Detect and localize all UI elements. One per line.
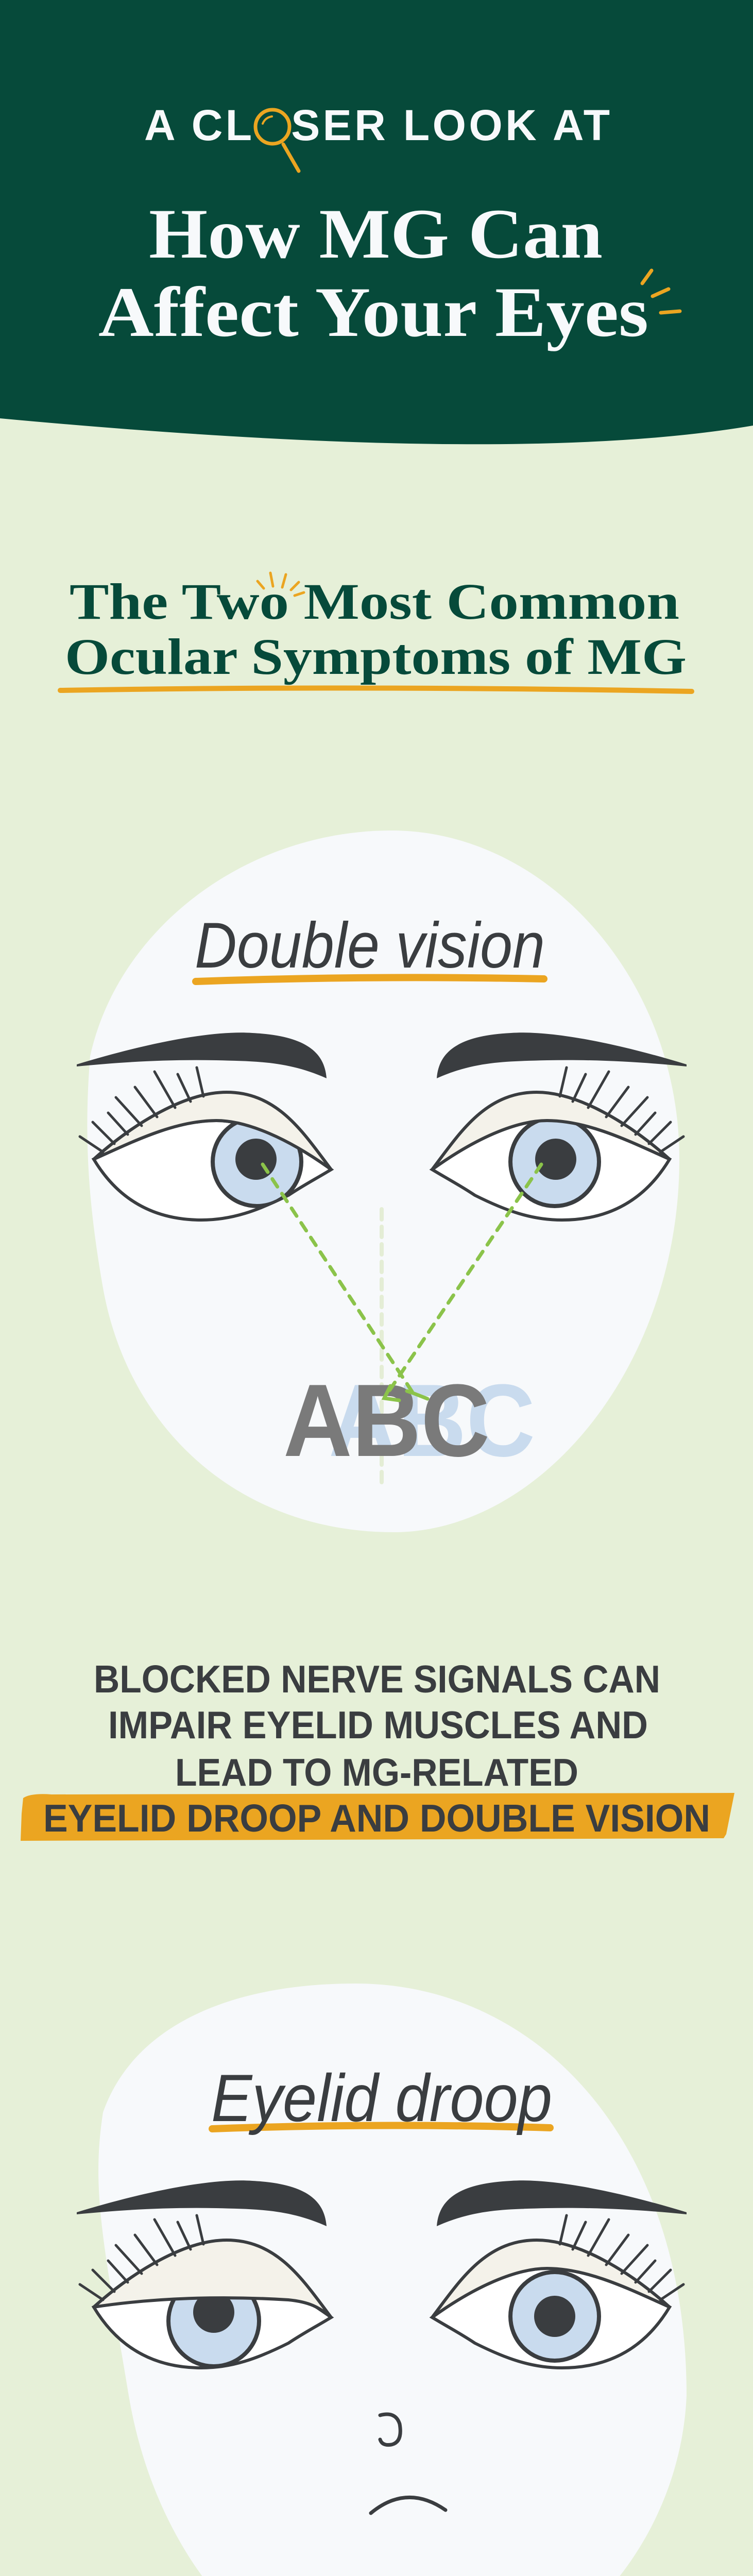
ABC text: ABC (329, 1363, 535, 1478)
eyes droop (77, 2180, 687, 2368)
pale center line (380, 1209, 384, 1487)
heading: eyelid droop: Eyelid droop (211, 2060, 552, 2136)
header band (0, 0, 753, 444)
panel: double vision face (77, 831, 687, 1532)
subtitle (60, 573, 692, 691)
header kicker (144, 101, 610, 171)
nose and mouth (371, 2414, 446, 2513)
underline (60, 688, 692, 691)
text block: blocked nerve signals: LEAD TO MG-RELATED (175, 1751, 578, 1794)
ABC text: ABC (283, 1363, 490, 1478)
text block: blocked nerve signals: IMPAIR EYELID MUSCLES AND (108, 1703, 648, 1747)
eyes (77, 1032, 687, 1220)
title: How MG Can (149, 194, 603, 273)
icon: magnifier (255, 110, 299, 171)
sight lines (263, 1164, 541, 1400)
subtitle: The Two Most Common (70, 573, 679, 630)
text block: blocked nerve signals: EYELID DROOP AND DOUBLE VISION (43, 1797, 710, 1840)
title (98, 194, 648, 351)
heading: double vision: Double vision (195, 910, 545, 981)
icon: sparkle subtitle (258, 573, 304, 596)
panel: eyelid droop face (77, 1984, 687, 2576)
header kicker: A CLOSER LOOK AT (144, 101, 610, 149)
text block: blocked nerve signals (21, 1657, 734, 1841)
icon: sparkle title (642, 270, 680, 313)
text block: blocked nerve signals: BLOCKED NERVE SIGNALS CAN (94, 1657, 660, 1701)
title: Affect Your Eyes (98, 273, 648, 351)
subtitle: Ocular Symptoms of MG (65, 628, 687, 685)
